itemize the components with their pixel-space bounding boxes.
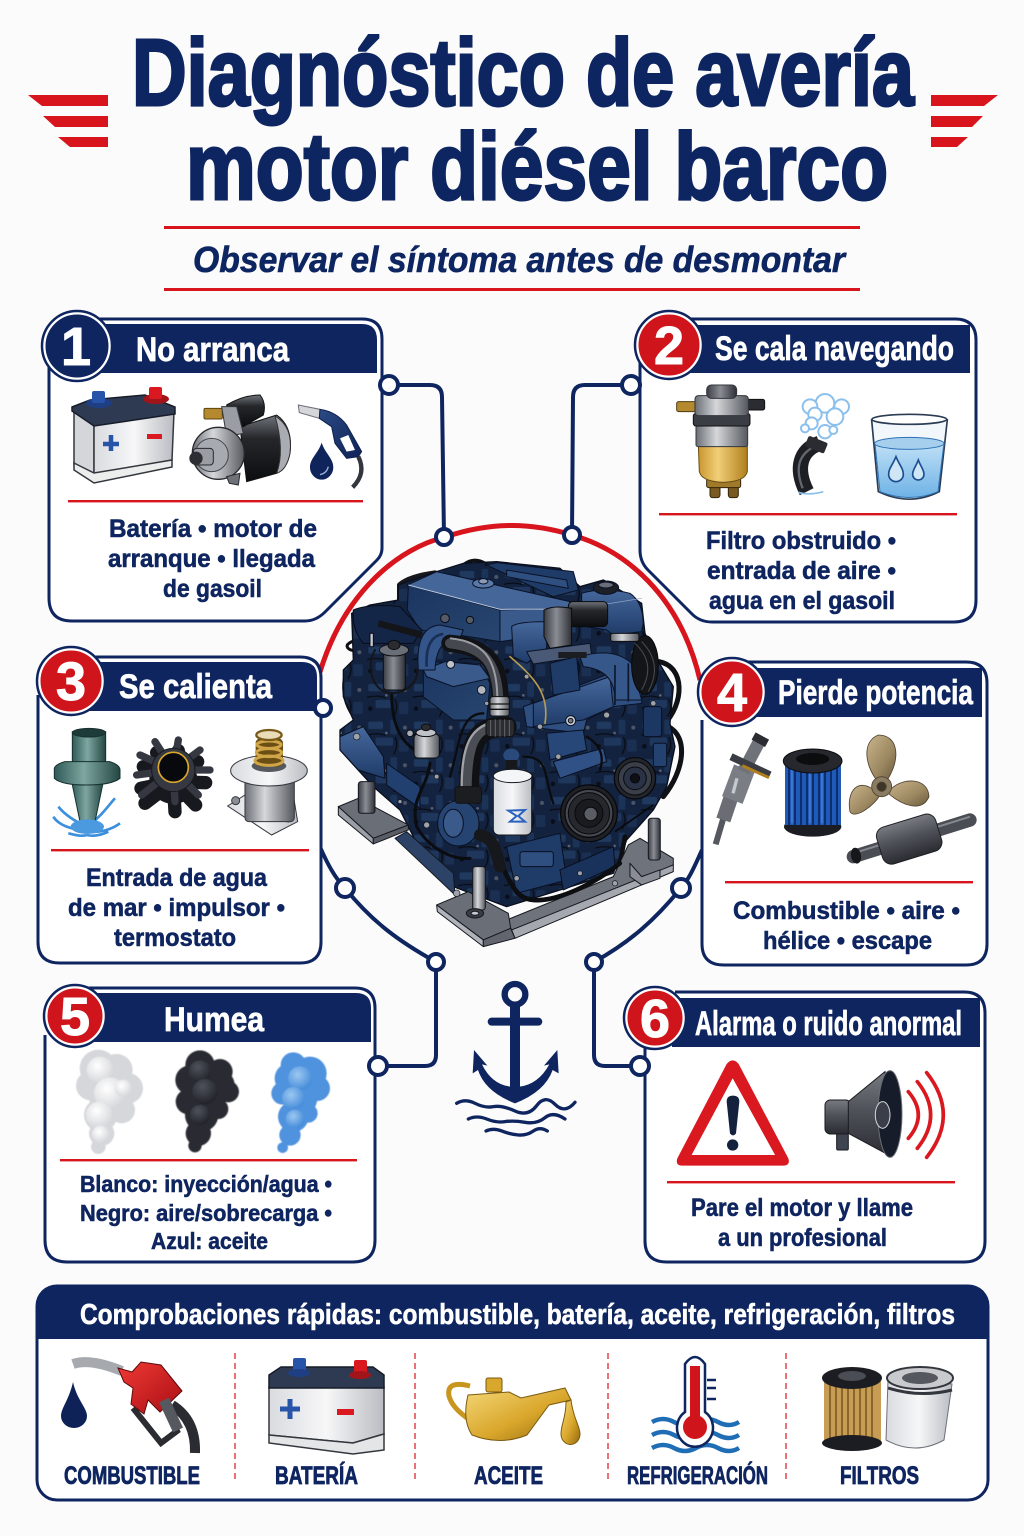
check labels: ACEITE: [474, 1462, 543, 1490]
icon: oil can: [449, 1378, 580, 1445]
panel 4 text: hélice • escape: [763, 927, 932, 955]
lower blue assemblies: [340, 707, 667, 893]
panel 3 heading: Se calienta: [119, 668, 273, 706]
panel 2 number badge: [635, 311, 703, 379]
panel 1 text: de gasoil: [163, 575, 262, 603]
column dividers: [235, 1353, 786, 1483]
icon: black smoke: [175, 1050, 239, 1152]
panel 5 text: Negro: aire/sobrecarga •: [80, 1200, 332, 1226]
panel 5 divider: [60, 1159, 357, 1161]
title: motor diésel barco: [186, 114, 888, 220]
icon: battery: [269, 1358, 384, 1454]
panel 5 text: [80, 1171, 332, 1254]
icon: fuel injector: [716, 736, 770, 844]
panel 2 header: [680, 325, 970, 373]
check labels: FILTROS: [840, 1462, 919, 1490]
panel 5 number badge: [44, 985, 106, 1047]
hoses and pipes: [371, 638, 625, 900]
panel 3 text: Entrada de agua: [86, 864, 268, 892]
icon: thermometer in water: [652, 1357, 739, 1451]
icon: fuel nozzle with drop: [298, 405, 362, 487]
icon: starter motor: [189, 395, 291, 485]
panel 3 header: [70, 662, 317, 711]
left rear dark assembly: [353, 606, 474, 647]
arch duct and left block: [418, 625, 490, 720]
panel 5 heading: Humea: [164, 1001, 265, 1039]
icon: warning triangle: [677, 1060, 789, 1166]
check labels: BATERÍA: [275, 1461, 358, 1490]
panel 6 text: Pare el motor y llame: [691, 1194, 913, 1222]
engine block silhouette: [340, 562, 675, 907]
panel 1 heading: No arranca: [136, 331, 290, 369]
panel 5 header: [80, 993, 371, 1042]
panel 2 divider: [659, 513, 957, 515]
panel 3 divider: [51, 849, 309, 851]
panel 2 number badge: 2: [654, 316, 684, 376]
oil filter canister: [493, 749, 532, 835]
panel 5 text: Blanco: inyección/agua •: [80, 1171, 332, 1197]
icon: thermostat: [228, 730, 307, 835]
panel 1 text: [108, 515, 317, 603]
panel 6 number badge: [624, 987, 686, 1049]
icon: air bubbles and hose: [798, 394, 849, 494]
panel 2 text: Filtro obstruido •: [706, 527, 896, 555]
panel 6: alarma o ruido anormal: [624, 987, 985, 1262]
subtitle: Observar el síntoma antes de desmontar: [193, 239, 847, 280]
panel 5 number badge: 5: [60, 987, 90, 1047]
panel 1 divider: [68, 500, 363, 502]
panel 4 text: Combustible • aire •: [733, 897, 960, 925]
panel 1 text: Batería • motor de: [109, 515, 317, 543]
panel 3 text: de mar • impulsor •: [68, 894, 285, 922]
hose clamps: [455, 697, 514, 803]
panel 3: se calienta: [37, 647, 321, 963]
panel 2 text: [706, 527, 896, 615]
panel 6 header: [672, 998, 980, 1047]
panel 3 number badge: [37, 647, 105, 715]
engine base and mounts: [338, 782, 673, 947]
panel 6 text: [691, 1194, 913, 1252]
icon: exhaust muffler: [850, 812, 970, 866]
icon: white smoke: [76, 1050, 143, 1154]
panel 2: se cala navegando: [635, 311, 976, 622]
valve cover: [407, 563, 578, 642]
panel 6 number badge: 6: [640, 989, 670, 1049]
icon: seawater intake: [53, 728, 120, 836]
panel 1 number badge: 1: [61, 317, 91, 377]
panel 4 heading: Pierde potencia: [778, 674, 974, 712]
engine bottom hose: [517, 863, 620, 900]
icon: right red stripes: [931, 95, 998, 147]
panel 5: humea: [44, 985, 375, 1262]
panel 1: no arranca: [42, 311, 382, 621]
check labels: [64, 1460, 919, 1490]
connector nodes: [315, 376, 690, 1075]
icon: left red stripes: [28, 95, 108, 147]
panel 1 number badge: [42, 311, 112, 381]
icon: alarm horn with sound waves: [825, 1071, 943, 1157]
panel 2 heading: Se cala navegando: [715, 330, 954, 368]
panel 4 text: [733, 897, 960, 955]
air cylinder and bracket: [544, 602, 608, 655]
fuel sediment bowls: [379, 640, 439, 758]
panel 6 divider: [667, 1181, 955, 1183]
icon: glass of water with drops: [872, 414, 947, 499]
engine illustration: [338, 560, 682, 947]
crankshaft pulleys: [561, 758, 656, 842]
engine rear hoses: [346, 560, 682, 797]
icon: battery: [72, 387, 175, 483]
title: [132, 20, 915, 220]
panel 4: pierde potencia: [698, 658, 987, 965]
central ring and connectors: [320, 385, 702, 1066]
icon: red fuel nozzle and drop: [61, 1362, 195, 1453]
icon: oil filters: [822, 1367, 953, 1451]
icon: water pump impeller: [137, 740, 210, 812]
panel 3 text: [68, 864, 285, 952]
panel 6 text: a un profesional: [718, 1224, 887, 1252]
panel 1 text: arranque • llegada: [108, 545, 316, 573]
check labels: COMBUSTIBLE: [64, 1462, 200, 1490]
panel 2 text: agua en el gasoil: [709, 587, 895, 615]
panel 4 header: [735, 668, 982, 717]
panel: comprobaciones rápidas: [37, 1285, 988, 1500]
panel 4 number badge: 4: [717, 663, 747, 723]
icon: blue air filter: [783, 749, 842, 837]
panel 5 text: Azul: aceite: [151, 1228, 268, 1254]
icon: anchor and waves: [457, 984, 575, 1135]
panel 4 divider: [725, 881, 973, 883]
quick checks header: [37, 1285, 988, 1339]
panel 3 number badge: 3: [56, 652, 86, 712]
icon: blue smoke: [271, 1052, 330, 1153]
panel 1 header: [96, 324, 377, 373]
panel 3 text: termostato: [114, 924, 236, 952]
pulley stack: [611, 633, 658, 694]
check labels: REFRIGERACIÓN: [627, 1460, 768, 1490]
header tank and upper right casing: [512, 581, 643, 733]
panel 2 text: entrada de aire •: [707, 557, 896, 585]
icon: boat propeller: [849, 735, 929, 814]
bolts: [353, 674, 656, 897]
subtitle: [164, 226, 860, 291]
icon: fuel filter: [677, 385, 765, 498]
panel 4 number badge: [698, 658, 766, 726]
